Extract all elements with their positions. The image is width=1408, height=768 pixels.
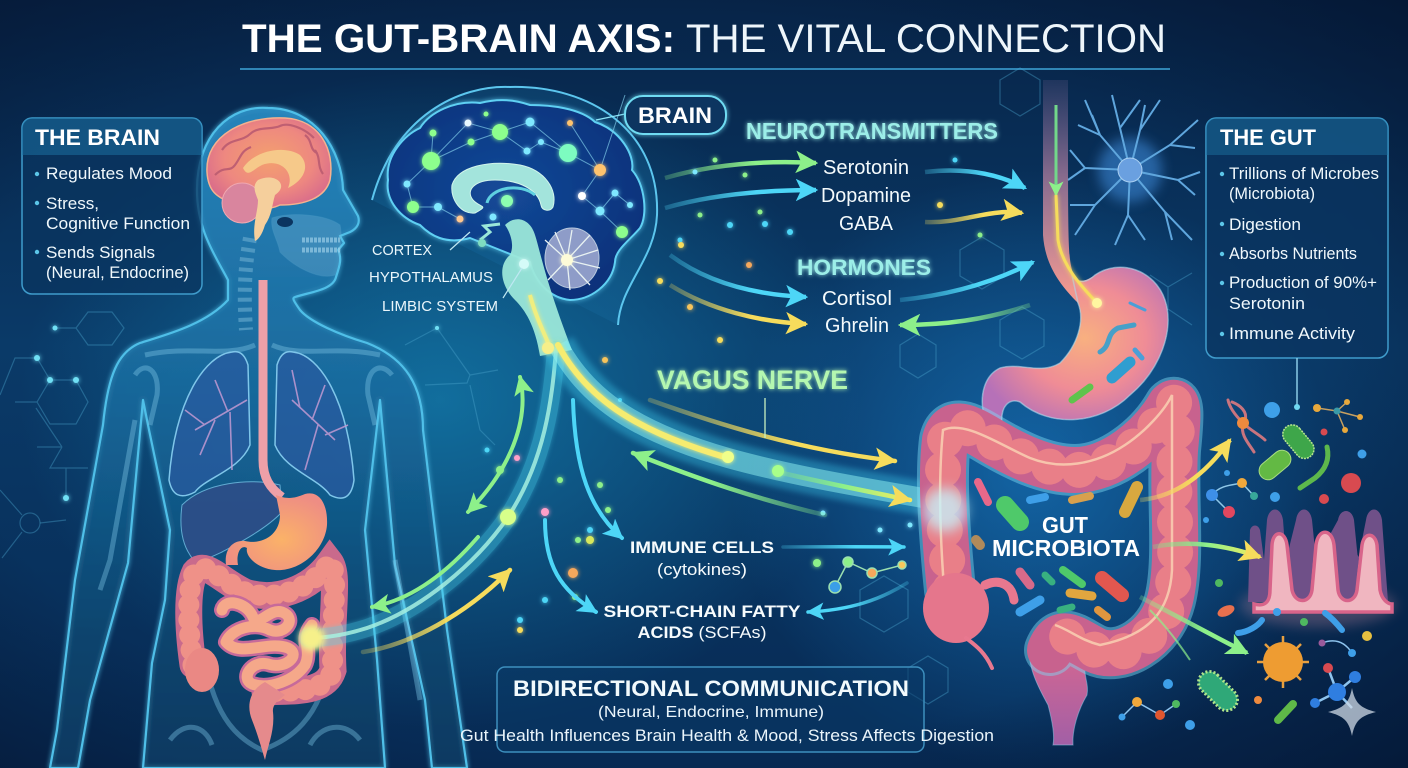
right molecule [1318, 640, 1356, 657]
villi base glow [1240, 583, 1396, 627]
panel list: Sends Signals [46, 243, 155, 262]
hormone list: Cortisol [822, 288, 892, 310]
scfa label [604, 602, 801, 642]
teeth [302, 240, 340, 250]
hormones heading: HORMONES [797, 255, 931, 280]
scfa label: ACIDS (SCFAs) [638, 623, 766, 642]
molecule blue [1310, 663, 1361, 708]
arrow to colon upper [650, 400, 895, 461]
blue rods [1238, 613, 1342, 633]
head cerebellum [222, 183, 262, 223]
panel heading: THE BRAIN [35, 125, 160, 150]
body double arrow [468, 377, 523, 512]
panel list: Trillions of Microbes [1229, 164, 1379, 183]
panel list: Cognitive Function [46, 214, 190, 233]
nerve to colon [558, 345, 945, 502]
panel list: Regulates Mood [46, 164, 172, 183]
nerve yellow core [558, 345, 728, 458]
title: THE GUT-BRAIN AXIS: [242, 17, 675, 61]
colon glow edge [943, 403, 1177, 653]
hormone list [822, 288, 892, 337]
skull [272, 215, 341, 276]
left molecule [1206, 478, 1258, 518]
green spiky bacterium [1279, 421, 1318, 462]
neurotransmitter list: GABA [839, 213, 894, 235]
colon to scfa [808, 583, 907, 612]
glow at body gut [299, 625, 325, 651]
brain stem [502, 219, 572, 356]
neurotransmitter list: Dopamine [821, 185, 911, 207]
panel list: Stress, [46, 194, 99, 213]
vagus nerve label: VAGUS NERVE [657, 365, 848, 395]
hexagon network pattern [0, 68, 1192, 704]
panel list: Digestion [1229, 215, 1301, 234]
neural connections [407, 95, 630, 232]
villi back [1248, 510, 1388, 602]
bronchi [185, 370, 348, 470]
small spheres [1163, 402, 1372, 730]
panel list [35, 164, 190, 282]
signal line green [1054, 105, 1058, 195]
brain region labels: HYPOTHALAMUS [369, 269, 493, 286]
title [240, 17, 1170, 70]
corpus callosum [452, 163, 554, 213]
brain region labels [369, 242, 498, 315]
liver [181, 482, 282, 561]
panel list: Serotonin [1229, 294, 1305, 313]
hypothalamus node [480, 224, 500, 240]
cerebellum [545, 228, 600, 290]
arrows from colon to microbes [1140, 440, 1260, 660]
appendix [966, 638, 992, 668]
molecule [829, 557, 906, 593]
neuron nodes [404, 112, 633, 269]
stomach microbes [1072, 303, 1145, 400]
small intestine [222, 603, 312, 686]
arrow to immune cells [573, 400, 622, 538]
large intestine [189, 562, 335, 692]
caecum [185, 648, 219, 692]
body green arrow [372, 537, 478, 607]
stomach interior [982, 267, 1168, 425]
panel text: (Neural, Endocrine, Immune) [598, 704, 824, 721]
villi front [1254, 532, 1392, 612]
gut microbiota label: GUT [1042, 512, 1088, 538]
title: THE VITAL CONNECTION [686, 17, 1166, 61]
inner arc [487, 188, 535, 203]
panel text: Gut Health Influences Brain Health & Mood, Stress Affects Digestion [460, 726, 994, 745]
brain label [596, 96, 726, 134]
tenia strip [940, 395, 1172, 645]
esophagus body [982, 80, 1168, 425]
spiky orange cell [1257, 636, 1309, 688]
pink microbe [1228, 400, 1265, 452]
gut microbiota label [992, 512, 1140, 561]
brain label: BRAIN [638, 103, 712, 128]
nerve nodes [500, 342, 784, 525]
ileum [985, 582, 1014, 600]
immune cells label [630, 538, 774, 579]
clavicles and shoulders [100, 345, 420, 750]
esophagus and stomach [982, 80, 1168, 425]
villi [1240, 510, 1396, 627]
colon [923, 395, 1177, 745]
stomach [226, 493, 327, 570]
haustra [943, 403, 1177, 653]
panel list [1220, 164, 1379, 343]
panel list: (Microbiota) [1229, 184, 1315, 203]
slim green rods [1300, 447, 1328, 488]
arrow to scfa [545, 520, 596, 612]
rectum [1029, 640, 1090, 745]
brain folds [215, 125, 323, 175]
panel: the brain [22, 118, 202, 294]
human body figure [50, 108, 467, 768]
corpus callosum [243, 150, 305, 188]
brain region labels: LIMBIC SYSTEM [382, 298, 498, 315]
left lung [169, 352, 250, 496]
green spiky bacillus [1194, 667, 1242, 715]
body silhouette [50, 108, 467, 768]
head brain [207, 118, 331, 209]
signal line yellow [1056, 195, 1097, 303]
spine [245, 238, 250, 330]
region leader lines [450, 232, 522, 298]
brain shape [388, 100, 644, 300]
hormone list: Ghrelin [825, 315, 889, 337]
vagus nerve pathway [299, 342, 945, 652]
arrows: neurotransmitters and hormones [665, 162, 1033, 325]
star [1092, 298, 1102, 308]
nerve core to colon [558, 345, 945, 502]
neurotransmitter list: Serotonin [823, 157, 909, 179]
microbes cluster [1118, 399, 1372, 730]
colon base [943, 403, 1177, 653]
contact glow [923, 488, 967, 532]
immune cells label: (cytokines) [657, 560, 747, 579]
sparkle icon [1328, 688, 1376, 736]
head brain stem [254, 178, 281, 241]
panel: the gut [1206, 118, 1388, 410]
signal particles [484, 158, 982, 633]
esophagus [263, 280, 282, 497]
panel list: Immune Activity [1229, 324, 1356, 343]
arrow inner green [778, 472, 910, 500]
panel: bidirectional communication [460, 667, 994, 752]
panel heading: BIDIRECTIONAL COMMUNICATION [513, 676, 909, 701]
rectum [249, 682, 285, 760]
network glow nodes [34, 322, 1152, 501]
arrow from colon lower [633, 453, 825, 515]
eye socket [277, 217, 293, 227]
small molecule [1118, 697, 1180, 720]
right lung [275, 352, 354, 498]
top molecule [1313, 399, 1363, 433]
villi recesses [1292, 548, 1359, 592]
immune to colon [783, 545, 904, 549]
neurotransmitter list [821, 157, 911, 235]
panel list: (Neural, Endocrine) [46, 263, 189, 282]
stem tail [530, 295, 552, 352]
head outline [372, 87, 657, 325]
body yellow arrow [363, 570, 510, 652]
panel list: Absorbs Nutrients [1229, 244, 1357, 263]
small green rod [1278, 704, 1293, 720]
gut microbiota label: MICROBIOTA [992, 535, 1140, 561]
caecum [923, 573, 989, 643]
nerve to body gut [308, 350, 556, 638]
panel heading: THE GUT [1220, 125, 1317, 150]
green bacillus [1255, 447, 1295, 483]
immune cells label: IMMUNE CELLS [630, 538, 774, 557]
scfa label: SHORT-CHAIN FATTY [604, 602, 801, 621]
neurotransmitters heading: NEUROTRANSMITTERS [746, 118, 998, 144]
brain region labels: CORTEX [372, 242, 432, 259]
panel list: Production of 90%+ [1229, 273, 1377, 292]
microbes [976, 482, 1137, 617]
neuron [1068, 95, 1200, 245]
inner nerve to body gut [308, 350, 556, 638]
large brain diagram [372, 87, 657, 356]
